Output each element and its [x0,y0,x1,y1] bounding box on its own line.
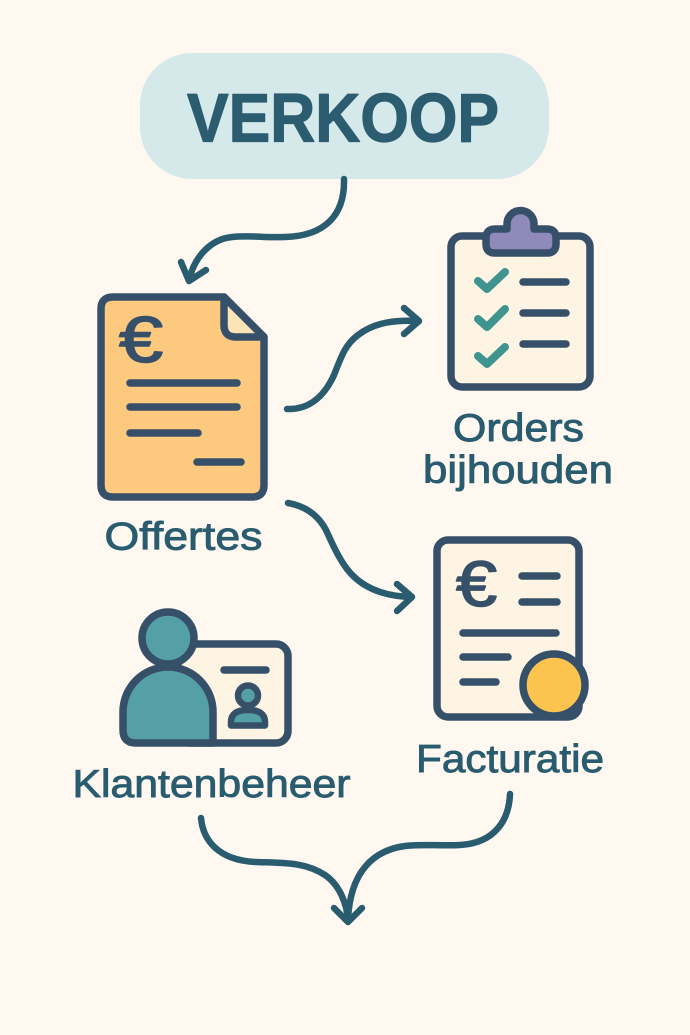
arrow: merging bottom arrows [201,794,510,922]
title: VERKOOP: VERKOOP [187,80,499,156]
icon: factuur: € [456,548,497,620]
label: Klantenbeheer: Klantenbeheer [72,763,351,806]
icon: offerte document [101,297,264,497]
arrow: verkoop to offertes [181,179,344,281]
arrow: offertes to orders [287,308,419,409]
icon: offerte document: € [119,303,163,376]
title: VERKOOP [140,53,549,179]
label: Orders bijhouden [423,407,613,492]
label: Offertes: Offertes [104,516,262,558]
label: Orders bijhouden: bijhouden [423,449,613,492]
label: Orders bijhouden: Orders [453,407,584,450]
arrow: offertes to facturatie [288,503,412,611]
icon: factuur [437,540,585,717]
label: Facturatie: Facturatie [416,738,604,781]
icon: klant met kaart [123,612,288,743]
icon: orders clipboard [451,210,590,387]
